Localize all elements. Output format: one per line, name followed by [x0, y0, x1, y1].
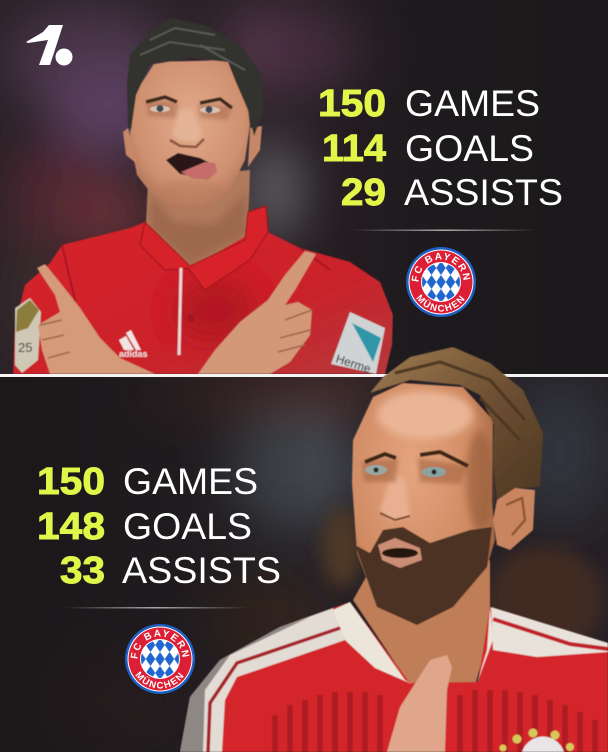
badge: FC Bayern top [406, 247, 476, 317]
right sleeve patch: Herme [334, 352, 373, 376]
panel: bottom Kane [0, 347, 608, 752]
eyes and brows [146, 97, 232, 108]
right sleeve patch [331, 312, 385, 376]
badge: FC Bayern top: FC BAYERN [412, 252, 470, 282]
white sleeve stripes left [180, 608, 345, 752]
ear [493, 488, 535, 550]
white shoulder stripes right [491, 607, 608, 657]
stats: bottom: 148 [37, 506, 105, 548]
logo: OneFootball [26, 25, 72, 66]
stats: top: GOALS [405, 128, 534, 169]
eyes and brows [365, 452, 468, 466]
blurred player right [490, 543, 606, 637]
badge: FC Bayern bottom [125, 624, 195, 694]
blurred player left [322, 508, 362, 588]
eye sockets [146, 100, 232, 120]
chin shadow [167, 172, 214, 195]
forehead highlight [377, 391, 473, 439]
adidas logo: adidas [119, 349, 148, 359]
neck [146, 170, 250, 266]
left sleeve patch: 25 [18, 340, 32, 355]
crest stars [500, 728, 574, 752]
stats: bottom: 33 [60, 550, 105, 592]
nose [380, 470, 410, 520]
stats: bottom: GAMES [123, 461, 258, 502]
cheek shadow [466, 430, 494, 530]
stats: top: 29 [341, 172, 386, 214]
head [130, 60, 250, 210]
beard [355, 527, 492, 625]
badge: FC Bayern bottom: MÜNCHEN [135, 671, 184, 689]
stats: top: 114 [322, 128, 386, 170]
stats: bottom: ASSISTS [122, 550, 281, 591]
adidas logo [119, 330, 148, 359]
photo: Lewandowski [13, 18, 393, 376]
collar [333, 602, 493, 684]
hair [127, 18, 264, 136]
shirt shadow [175, 278, 255, 342]
grey sleeve overlay [180, 617, 310, 752]
badge: FC Bayern top: MÜNCHEN [416, 294, 465, 312]
hands [37, 264, 155, 374]
left sleeve patch [15, 298, 41, 373]
stats: bottom [37, 461, 281, 592]
head [352, 383, 495, 625]
stats: top: GAMES [405, 83, 540, 124]
neck [353, 560, 490, 685]
jersey [13, 206, 393, 374]
stats: top: 150 [318, 83, 386, 125]
stats: bottom: GOALS [123, 506, 252, 547]
panel: top Lewandowski [0, 0, 608, 374]
stats: top: ASSISTS [404, 172, 563, 213]
jersey pinstripes [275, 690, 595, 752]
badge: FC Bayern bottom: FC BAYERN [130, 630, 190, 659]
nose [172, 110, 202, 142]
hand [387, 655, 452, 752]
stats: top [318, 83, 563, 214]
stats: bottom: 150 [37, 461, 105, 503]
mouth and tongue [166, 152, 209, 176]
bottom background [0, 370, 608, 752]
collar [140, 206, 268, 290]
mouth [378, 538, 422, 568]
neck shadow [150, 190, 247, 264]
hair [370, 347, 543, 500]
eye sockets [362, 458, 468, 484]
ears [122, 128, 135, 162]
jersey [180, 602, 608, 752]
top background [0, 0, 608, 374]
crest [522, 737, 564, 752]
divider [0, 374, 608, 377]
photo: Kane [180, 347, 608, 752]
